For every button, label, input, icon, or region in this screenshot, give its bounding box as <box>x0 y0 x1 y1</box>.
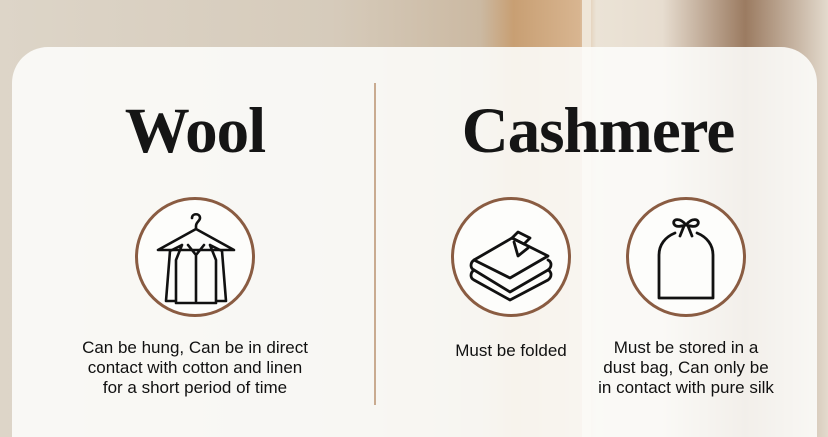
text: dust bag caption <box>598 338 774 397</box>
text: dust bag caption: dust bag, Can only be <box>603 358 769 377</box>
icon: folded clothes <box>451 197 571 317</box>
text: wool caption: Can be hung, Can be in direct <box>82 338 308 357</box>
text: wool caption <box>82 338 308 397</box>
text: wool caption: for a short period of time <box>103 378 287 397</box>
icon: hanger with shirt <box>135 197 255 317</box>
wardrobe pole <box>582 0 591 437</box>
icon: dust bag <box>626 197 746 317</box>
text: folded caption: Must be folded <box>455 341 567 360</box>
divider <box>374 83 376 405</box>
text: wool caption: contact with cotton and linen <box>88 358 302 377</box>
text: dust bag caption: Must be stored in a <box>614 338 758 357</box>
heading: Wool: Wool <box>125 95 265 167</box>
text: dust bag caption: in contact with pure silk <box>598 378 774 397</box>
heading: Cashmere: Cashmere <box>462 95 734 167</box>
